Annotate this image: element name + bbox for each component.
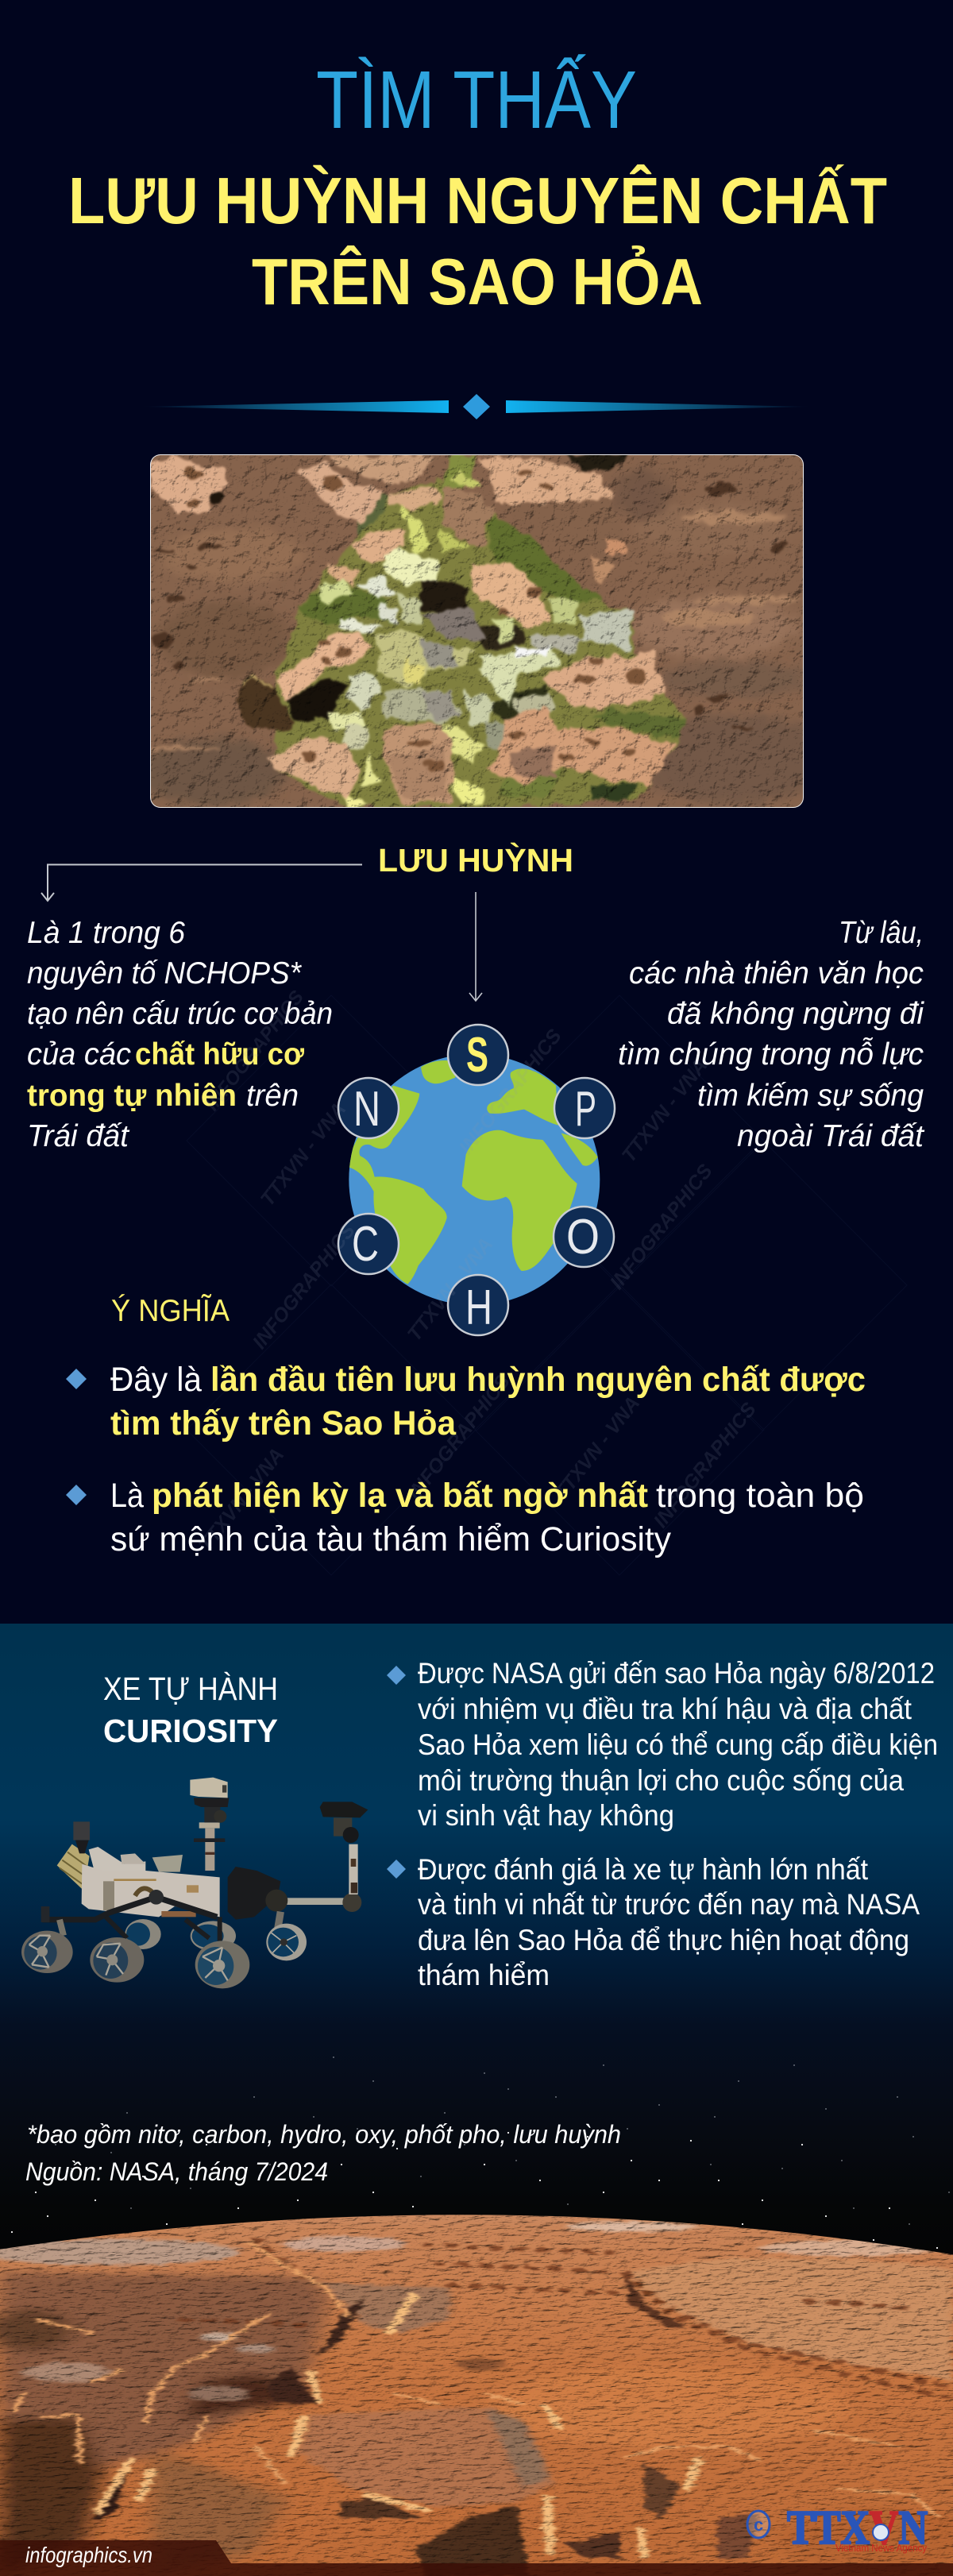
bullet: largest rover: và tinh vi nhất từ trước đến nay mà NASA: [418, 1888, 920, 1921]
tan rocks: [150, 457, 227, 516]
footer bar: infographics.vn: infographics.vn: [25, 2543, 152, 2567]
panel: Curiosity rover background: [0, 1624, 953, 2283]
dark gaps: [567, 454, 630, 473]
bullet: mission of the rover: [387, 1657, 938, 1832]
bullet: first significance: lần đầu tiên lưu huỳnh nguyên chất được: [210, 1361, 866, 1399]
wheel: far front: [266, 1924, 307, 1960]
heading: XE TỰ HÀNH CURIOSITY: XE TỰ HÀNH: [103, 1670, 278, 1707]
watermarks: INFOGRAPHICS: [650, 1398, 761, 1532]
bullet: largest rover: [387, 1853, 920, 1991]
element circle: P: [554, 1078, 615, 1138]
heading: XE TỰ HÀNH CURIOSITY: CURIOSITY: [103, 1713, 278, 1749]
element circle: S: [448, 1025, 508, 1085]
photo: native sulfur among rocks on Mars: [150, 454, 804, 808]
icon: diamond bullet: [66, 1485, 87, 1505]
watermarks: INFOGRAPHICS: [606, 1160, 717, 1294]
watermarks: INFOGRAPHICS: [403, 1370, 515, 1504]
bullet: second significance: trong toàn bộ: [656, 1477, 864, 1515]
bullet: first significance: tìm thấy trên Sao Hỏa: [110, 1404, 457, 1442]
text block: rover facts: [387, 1657, 938, 1991]
watermarks: TTXVN - VNA: [550, 1392, 644, 1504]
logo: TTXVN: TTXVN: [787, 2501, 928, 2554]
text block: right description: các nhà thiên văn học: [629, 956, 924, 991]
ridge crests: [12, 2240, 953, 2555]
footnote and source: *bao gồm nitơ, carbon, hydro, oxy, phốt pho, lưu huỳnh: [27, 2120, 621, 2149]
text block: right description: đã không ngừng đi: [667, 997, 924, 1031]
element circle: O: O: [566, 1210, 600, 1265]
element circle: P: P: [575, 1082, 596, 1137]
heading: Ý NGHĨA: Ý NGHĨA: [111, 1294, 230, 1328]
heading: LƯU HUỲNH: LƯU HUỲNH: [378, 842, 573, 879]
title line: TÌM THẤY: TÌM THẤY: [316, 54, 637, 145]
pits on the rocks: [181, 468, 645, 770]
text block: left description: của các: [27, 1037, 131, 1072]
element circle: N: [338, 1078, 399, 1138]
watermarks: INFOGRAPHICS: [249, 1219, 360, 1354]
title: [68, 54, 887, 319]
text block: left description: nguyên tố NCHOPS*: [27, 956, 303, 991]
icon: Earth globe: [347, 1054, 600, 1305]
icon: diamond bullet: [66, 1369, 87, 1389]
element circle: O: [554, 1207, 614, 1267]
element circle: C: [338, 1214, 399, 1274]
suspension: [42, 1897, 217, 1920]
text block: right description: [618, 916, 925, 1153]
illustration: Curiosity rover: [21, 1778, 368, 1988]
diamond divider: [140, 394, 813, 419]
bullet: largest rover: đưa lên Sao Hỏa để thực hiện hoạt động: [418, 1924, 909, 1956]
bullet: first significance: [66, 1361, 866, 1442]
watermarks: INFOGRAPHICS: [455, 1025, 566, 1159]
heading: XE TỰ HÀNH CURIOSITY: [103, 1670, 278, 1749]
dark soil clods: [150, 484, 787, 729]
watermarks: TTXVN - VNA: [257, 1099, 350, 1211]
text block: right description: Từ lâu,: [839, 916, 924, 950]
arrow: heading to left text: [41, 864, 362, 901]
logo: TTXVN: c: [754, 2515, 763, 2535]
footnote and source: Nguồn: NASA, tháng 7/2024: [25, 2157, 328, 2186]
logo: TTXVN: Vietnam News Agency: [835, 2542, 927, 2554]
text block: left description: tạo nên cấu trúc cơ bản: [27, 997, 333, 1031]
yellow-green crystals: [400, 504, 430, 555]
tan rocks on top: [471, 562, 550, 627]
RTG, antenna and deck: [57, 1844, 90, 1890]
text block: left description: [27, 916, 333, 1153]
arrow: heading to globe: [469, 892, 482, 1001]
text block: right description: ngoài Trái đất: [737, 1119, 925, 1153]
text block: left description: chất hữu cơ: [135, 1037, 304, 1072]
text block: right description: tìm chúng trong nỗ lực: [618, 1037, 924, 1072]
bullet: second significance: [66, 1477, 864, 1558]
image: surface of Mars: [0, 2176, 953, 2576]
wheel: front: [195, 1941, 249, 1988]
watermarks: TTXVN - VNA: [618, 1055, 712, 1167]
bullet: second significance: Là: [110, 1477, 144, 1515]
footer bar: infographics.vn: [0, 2540, 953, 2576]
bullet: mission of the rover: vi sinh vật hay không: [418, 1799, 674, 1832]
title line: TRÊN SAO HỎA: TRÊN SAO HỎA: [252, 245, 703, 319]
element circle: S: S: [466, 1028, 488, 1083]
body: [82, 1864, 220, 1917]
shadowed hollows: [91, 2272, 760, 2576]
wheel: middle: [90, 1937, 144, 1983]
watermarks: TTXVN - VNA: [195, 1444, 288, 1556]
element circle: H: H: [465, 1280, 492, 1335]
text block: left description: trên: [246, 1079, 299, 1113]
icon: diamond bullet: [387, 1860, 406, 1879]
bullet: largest rover: Được đánh giá là xe tự hành lớn nhất: [418, 1853, 869, 1886]
watermarks: TTXVN - VNA: [403, 1234, 497, 1346]
back wheels: [125, 1919, 236, 1951]
text block: left description: Trái đất: [27, 1119, 130, 1153]
diagram: Earth with the six NCHOPS elements: [338, 1025, 615, 1335]
element circle: H: [448, 1275, 508, 1335]
bullet: largest rover: thám hiểm: [418, 1959, 550, 1991]
bullet: mission of the rover: môi trường thuận lợi cho cuộc sống của: [418, 1764, 904, 1797]
element circle: C: C: [352, 1217, 379, 1272]
base of the sulfur vein: [275, 481, 684, 808]
turret and robotic arm: [228, 1802, 368, 1941]
footnote and source: [25, 2120, 621, 2186]
bullet: second significance: phát hiện kỳ lạ và bất ngờ nhất: [152, 1477, 648, 1515]
text block: right description: tìm kiếm sự sống: [697, 1079, 924, 1113]
icon: diamond bullet: [387, 1666, 406, 1685]
title line: LƯU HUỲNH NGUYÊN CHẤT: LƯU HUỲNH NGUYÊN CHẤT: [68, 163, 887, 238]
watermarks: [195, 987, 761, 1556]
bullet: first significance: Đây là: [110, 1361, 202, 1399]
stars: [12, 2133, 937, 2250]
mast: [190, 1778, 229, 1871]
text block: left description: trong tự nhiên: [27, 1079, 237, 1113]
bullet: second significance: sứ mệnh của tàu thám hiểm Curiosity: [110, 1520, 671, 1558]
watermarks: INFOGRAPHICS: [201, 987, 308, 1115]
wheel: rear: [21, 1931, 73, 1973]
dark green sulfur: [298, 587, 396, 627]
text block: left description: Là 1 trong 6: [27, 916, 185, 950]
bullet: mission of the rover: với nhiệm vụ điều tra khí hậu và địa chất: [418, 1693, 912, 1725]
element circle: N: N: [353, 1082, 380, 1137]
